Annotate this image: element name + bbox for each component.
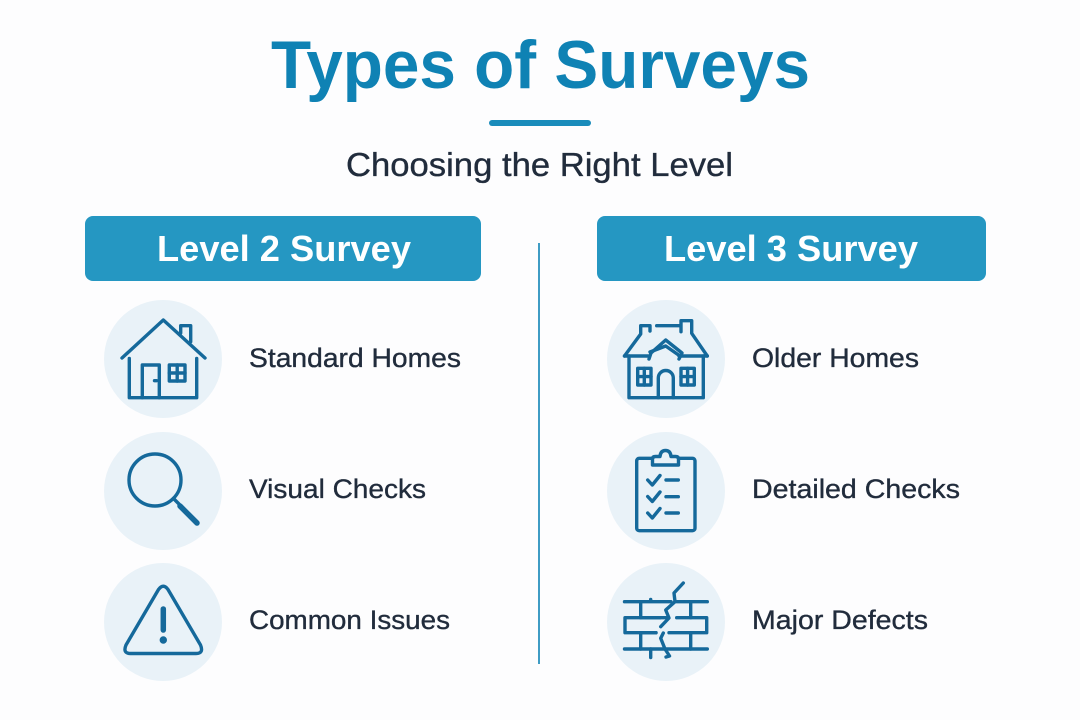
title: Types of Surveys [271, 27, 810, 103]
column divider [538, 243, 540, 664]
subtitle: Choosing the Right Level [346, 146, 733, 183]
heading: Level 2 Survey [85, 216, 481, 281]
icon: magnifying glass [129, 454, 197, 523]
item: Visual Checks [104, 432, 426, 550]
icon: clipboard checklist [637, 450, 695, 531]
item: Common Issues [104, 563, 450, 681]
heading: Level 2 Survey: Level 2 Survey [157, 228, 411, 269]
icon: cracked brick wall [624, 583, 707, 658]
item: Older Homes: Older Homes [752, 343, 919, 373]
icon: older house [624, 321, 707, 398]
icon: house [122, 320, 205, 398]
icon: warning triangle [125, 586, 202, 654]
heading: Level 3 Survey [597, 216, 986, 281]
item: Major Defects [607, 563, 928, 681]
item: Major Defects: Major Defects [752, 605, 928, 635]
title underline [489, 120, 591, 126]
item: Common Issues: Common Issues [249, 605, 450, 635]
panel: Level 3 Survey [597, 216, 986, 681]
item: Visual Checks: Visual Checks [249, 474, 426, 504]
item: Standard Homes: Standard Homes [249, 343, 461, 373]
panel: Level 2 Survey [85, 216, 481, 681]
item: Detailed Checks [607, 432, 960, 550]
heading: Level 3 Survey: Level 3 Survey [664, 228, 918, 269]
item: Detailed Checks: Detailed Checks [752, 474, 960, 504]
item: Older Homes [607, 300, 919, 418]
item: Standard Homes [104, 300, 461, 418]
